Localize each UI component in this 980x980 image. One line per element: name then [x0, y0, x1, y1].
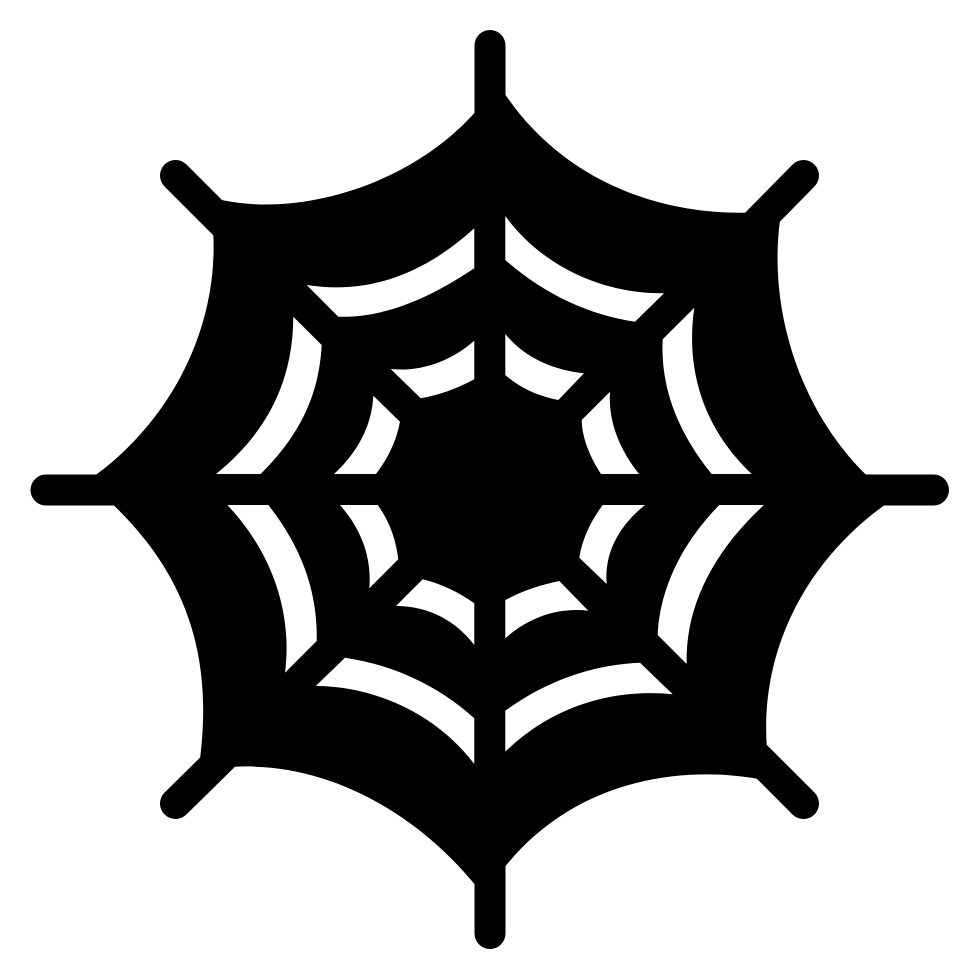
web body silhouette [96, 95, 884, 884]
web gaps: outer ring [216, 216, 764, 764]
web gaps: inner ring [334, 334, 645, 645]
